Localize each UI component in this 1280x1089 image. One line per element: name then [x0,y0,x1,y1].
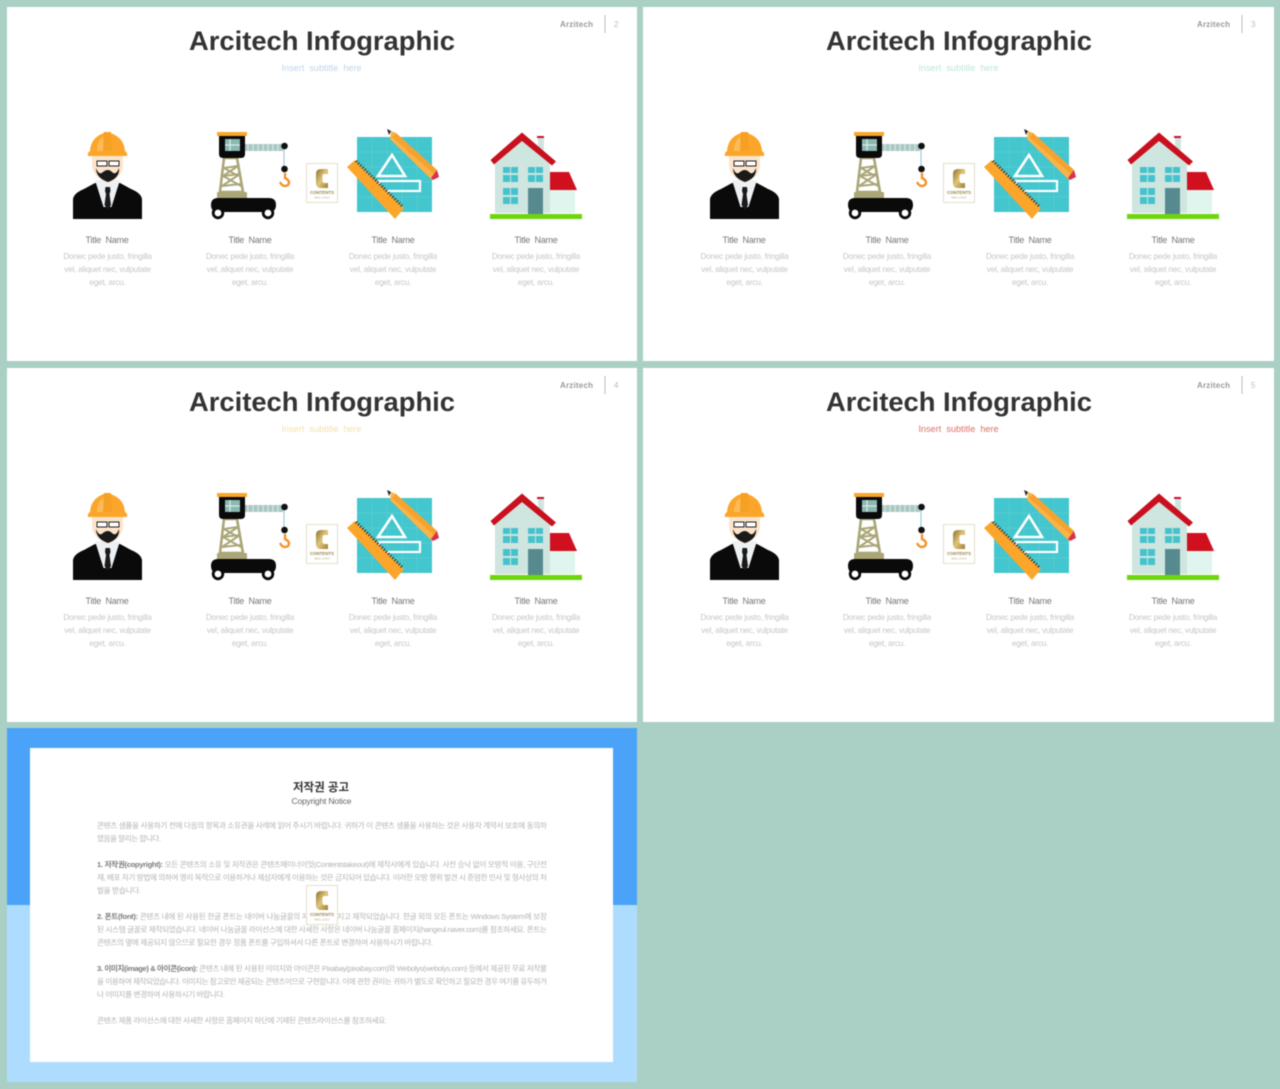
watermark logo [306,164,338,202]
text block: item 1: Donec pede justo, fringilla [63,613,152,622]
panel: slide 2 [7,7,637,361]
text block: item 4: vel, aliquet nec, vulputate [493,626,580,635]
text block: item 1: eget, arcu. [726,639,763,648]
text block: item 2: eget, arcu. [232,278,268,287]
text block: item 3: Donec pede justo, fringilla [986,613,1075,622]
text block: font: 콘텐츠의 옆에 제공되지 않으므로 필요한 경우 정품 폰트를 구입하셔서 다른 폰트로 변경하여 사용하시기 바랍니다. [97,937,433,947]
text block: item 4: eget, arcu. [1155,278,1191,287]
watermark logo: MAIL LOGO [951,196,967,200]
watermark logo: CONTENTS [310,551,334,556]
watermark logo: CONTENTS [310,912,334,917]
text block: copyright: 재, 배포 자기 방법에 의하여 영리 목적으로 이용하거나 제삼자에게 이용하는 것은 금지되어 있습니다. 이러한 모방 행위 발견 시 준엄한 민사 및 형사상의 처 [97,872,547,882]
text block: item 2: Title Name [229,235,272,245]
icon: house [490,132,582,219]
text block: item 3 [349,596,438,648]
heading: copyright notice: Copyright Notice [292,796,352,806]
watermark logo: MAIL LOGO [314,918,330,922]
header brand: Arzitech [1197,20,1230,29]
text block: item 2: vel, aliquet nec, vulputate [844,265,931,274]
text block: item 2 [843,596,932,648]
watermark logo [944,164,974,202]
text block: item 2: Donec pede justo, fringilla [843,613,932,622]
text block: item 3: Donec pede justo, fringilla [986,252,1075,261]
text block: item 1: eget, arcu. [89,639,126,648]
icon: crane [848,132,926,219]
text block: font: 된 시스템 글꼴로 제작되었습니다. 네이버 나눔글꼴 라이선스에 대한 사세한 사항은 네이버 나눔글꼴 홈페이지(hangeul.naver.com)를 참조하세요. 폰트는 [97,924,547,934]
text block: item 4: Donec pede justo, fringilla [1129,252,1218,261]
icon: blueprint [984,129,1076,219]
text block: copyright: 1. 저작권(copyright): 모든 콘텐츠의 소유 및 저작권은 콘텐츠메이너이엇(Contentstakeout)에 제작사에게 있습니다. 사전 승낙 없이 모방적 이용, 구단전 [97,859,547,869]
text block: item 3: eget, arcu. [375,278,411,287]
icon: blueprint [347,490,439,580]
text block: item 2: eget, arcu. [232,639,268,648]
text block: item 4: eget, arcu. [518,278,554,287]
title: Arcitech Infographic [826,26,1092,56]
panel: slide 5 [643,368,1274,722]
text block: item 2: vel, aliquet nec, vulputate [207,626,294,635]
header brand: Arzitech [560,381,593,390]
text block: copyright: 벌을 받습니다. [97,885,141,895]
watermark logo: CONTENTS [947,551,971,556]
heading: copyright notice: 저작권 공고 [293,780,349,794]
heading: copyright notice [292,780,352,806]
text block: intro [97,820,547,843]
text block: item 2: eget, arcu. [869,639,905,648]
text block: item 1: vel, aliquet nec, vulputate [64,265,151,274]
icon: architect [73,132,142,219]
text block: item 4 [492,596,581,648]
text block: item 2: vel, aliquet nec, vulputate [207,265,294,274]
text block: item 4: eget, arcu. [518,639,554,648]
text block: item 2 [206,235,295,287]
text block: item 2 [206,596,295,648]
header brand: Arzitech [560,20,593,29]
text block: item 4: vel, aliquet nec, vulputate [493,265,580,274]
icon: blueprint [984,490,1076,580]
watermark logo [944,524,974,564]
text block: item 3: vel, aliquet nec, vulputate [987,626,1074,635]
text block: item 1 [63,596,152,648]
text block: item 3: vel, aliquet nec, vulputate [987,265,1074,274]
text block: item 2: Donec pede justo, fringilla [206,613,295,622]
text block: item 1: Title Name [86,235,129,245]
icon: architect [73,493,142,580]
text block: license note: 콘텐츠 제품 라이선스에 대한 사세한 사항은 홈페이지 하단에 기재된 콘텐츠라이선스를 참조하세요. [97,1015,387,1025]
text block: item 4: vel, aliquet nec, vulputate [1130,265,1217,274]
text block: item 2: Title Name [229,596,272,606]
icon: crane [211,493,289,580]
text block: item 1: Title Name [86,596,129,606]
text block: item 1: vel, aliquet nec, vulputate [64,626,151,635]
text block: item 4: Title Name [1152,235,1195,245]
text block: item 1 [63,235,152,287]
subtitle: Insert subtitle here [918,63,998,73]
text block: item 3: vel, aliquet nec, vulputate [350,626,437,635]
text block: item 4: Title Name [1152,596,1195,606]
watermark logo [306,886,338,924]
text block: font [97,911,547,947]
text block: image and icon: 을 이용하여 제작되었습니다. 이미지는 참고로만 제공되는 콘텐츠이므로 구현합니다. 이에 관한 권리는 귀하가 별도로 확인하고 필요한 경우 여기를 유두하거 [97,976,547,986]
text block: item 1: Title Name [723,235,766,245]
header brand: Arzitech [1197,381,1230,390]
text block: item 1 [700,596,789,648]
text block: item 3: Title Name [1009,235,1052,245]
watermark logo: CONTENTS [310,190,334,195]
icon: crane [848,493,926,580]
text block: item 4: Title Name [515,235,558,245]
text block: item 2: Donec pede justo, fringilla [206,252,295,261]
text block: item 1: eget, arcu. [89,278,126,287]
panel: slide 4 [7,368,637,722]
text block: item 3 [986,235,1075,287]
text block: item 4: vel, aliquet nec, vulputate [1130,626,1217,635]
text block: item 4: Title Name [515,596,558,606]
icon: crane [211,132,289,219]
watermark logo: MAIL LOGO [951,556,967,560]
subtitle: Insert subtitle here [918,424,998,434]
watermark logo: MAIL LOGO [314,556,330,560]
text block: image and icon: 나 이미지를 변경하여 사용하시기 바랍니다. [97,989,225,999]
text block: item 1: eget, arcu. [726,278,763,287]
text block: item 2: Title Name [866,596,909,606]
text block: item 2: Donec pede justo, fringilla [843,252,932,261]
watermark logo [306,524,338,564]
text block: item 1: Donec pede justo, fringilla [700,252,789,261]
text block: intro: 콘텐츠 샘플을 사용하기 전에 다음의 항목과 소유권을 사례에 읽어 주시기 바랍니다. 귀하가 이 콘텐츠 샘플을 사용하는 것은 사용자 계약서 보호에 동의하 [97,820,547,830]
text block: item 3: Donec pede justo, fringilla [349,613,438,622]
icon: house [1127,494,1219,580]
text block: item 4: Donec pede justo, fringilla [492,252,581,261]
text block: item 3 [986,596,1075,648]
page number: 2 [614,20,619,29]
text block: item 1: Donec pede justo, fringilla [63,252,152,261]
page number: 4 [614,381,619,390]
icon: architect [710,132,779,219]
text block: item 1: vel, aliquet nec, vulputate [701,265,788,274]
text block: item 1: Donec pede justo, fringilla [700,613,789,622]
watermark logo: MAIL LOGO [314,196,330,200]
text block: item 4: eget, arcu. [1155,639,1191,648]
text block: item 4 [492,235,581,287]
text block: item 3: Donec pede justo, fringilla [349,252,438,261]
text block: item 2: eget, arcu. [869,278,905,287]
text block: item 3: Title Name [1009,596,1052,606]
text block: item 3: vel, aliquet nec, vulputate [350,265,437,274]
panel: slide 3 [643,7,1274,361]
panel: copyright notice [7,728,637,1082]
text block: item 1 [700,235,789,287]
text block: item 4: Donec pede justo, fringilla [1129,613,1218,622]
text block: item 4 [1129,596,1218,648]
text block: item 3: Title Name [372,235,415,245]
text block: item 1: vel, aliquet nec, vulputate [701,626,788,635]
subtitle: Insert subtitle here [282,424,362,434]
text block: item 3: eget, arcu. [1012,639,1048,648]
text block: item 3: eget, arcu. [1012,278,1048,287]
text block: image and icon: 3. 이미지(image) & 아이콘(icon): 콘텐츠 내에 된 사용된 이미지와 아이콘은 Pixabay(pixabay.com)와 Webolys(webolys.com) 등에서 제공된 무료 저작물 [97,963,547,973]
text block: item 2 [843,235,932,287]
text block: item 1: Title Name [723,596,766,606]
subtitle: Insert subtitle here [282,63,362,73]
page number: 3 [1251,20,1256,29]
icon: house [490,494,582,580]
text block: item 3: eget, arcu. [375,639,411,648]
title: Arcitech Infographic [189,387,455,417]
icon: architect [710,493,779,580]
watermark logo: CONTENTS [947,190,971,195]
title: Arcitech Infographic [826,387,1092,417]
page number: 5 [1251,381,1256,390]
icon: blueprint [347,129,439,219]
text block: copyright [97,859,547,895]
text block: font: 2. 폰트(font): 콘텐츠 내에 된 사용된 한글 폰트는 네이버 나눔글꼴의 저작권을 가지고 제작되었습니다. 한글 외의 모든 폰트는 Windows System에 보장 [97,911,547,921]
icon: house [1127,132,1219,219]
title: Arcitech Infographic [189,26,455,56]
text block: item 2: Title Name [866,235,909,245]
text block: intro: 였음을 알리는 합니다. [97,833,161,843]
text block: item 2: vel, aliquet nec, vulputate [844,626,931,635]
text block: item 4 [1129,235,1218,287]
text block: image and icon [97,963,547,999]
text block: item 3: Title Name [372,596,415,606]
text block: item 3 [349,235,438,287]
text block: item 4: Donec pede justo, fringilla [492,613,581,622]
